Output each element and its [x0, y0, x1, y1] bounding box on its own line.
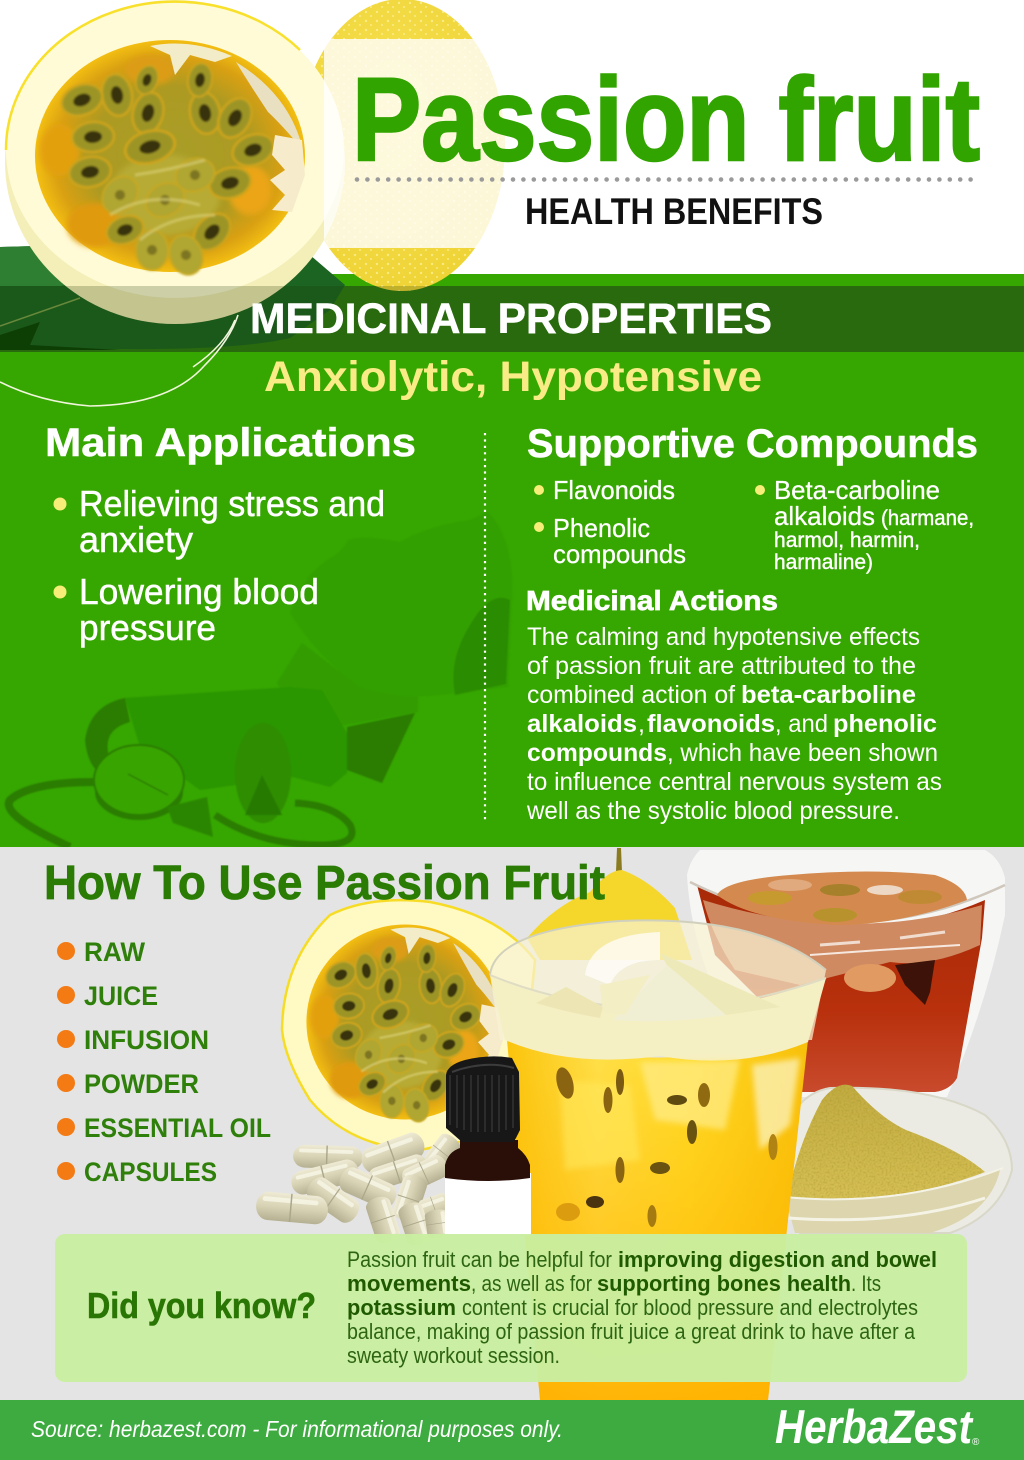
- callout body text: supporting bones health: [597, 1271, 851, 1296]
- source line: Source: herbazest.com - For informational purposes only.: [31, 1416, 563, 1442]
- item: raw: [57, 937, 145, 967]
- callout body text: [347, 1247, 937, 1368]
- passion fruit seeds in juice: [553, 1065, 778, 1227]
- illustration: woman and blood pressure monitor silhouette: [9, 512, 512, 847]
- bullet: relieving stress: anxiety: [79, 519, 193, 560]
- text: medicinal actions body: well as the systolic blood pressure.: [526, 797, 900, 825]
- callout body text: improving digestion and bowel: [618, 1247, 937, 1272]
- decorative overlay tint on band: [0, 286, 1024, 352]
- text: medicinal actions body: [526, 623, 942, 825]
- bullet: beta-carboline alkaloids: [755, 475, 974, 574]
- item: essential oil: ESSENTIAL OIL: [84, 1113, 271, 1143]
- item: juice: JUICE: [84, 981, 158, 1011]
- item: raw: RAW: [84, 937, 145, 967]
- bullet: relieving stress: Relieving stress and: [79, 483, 385, 524]
- text: medicinal actions body: alkaloids: [527, 710, 637, 738]
- dotted rule under title: [357, 177, 980, 182]
- illustration: thin white curve: [0, 315, 238, 406]
- panel: medicinal properties green background: [0, 274, 1024, 847]
- illustration: whole passion fruit: [299, 0, 505, 291]
- ice cubes: [536, 953, 780, 1021]
- logo: ®: [972, 1437, 980, 1448]
- text: medicinal actions body: phenolic: [833, 710, 937, 738]
- subheading: medicinal actions: Medicinal Actions: [526, 585, 778, 616]
- callout: did you know: [55, 1234, 967, 1382]
- illustration: halved passion fruit: [5, 0, 345, 324]
- callout heading: Did you know?: [87, 1285, 316, 1326]
- illustration: tea glass: [687, 850, 1005, 1097]
- text: medicinal actions body: , which have been shown: [667, 739, 938, 767]
- callout body text: sweaty workout session.: [347, 1343, 560, 1368]
- panel: main applications: [45, 421, 416, 648]
- callout body text: , as well as for: [471, 1271, 592, 1296]
- panel: supportive compounds: [526, 422, 978, 825]
- callout body text: content is crucial for blood pressure and electrolytes: [462, 1295, 918, 1320]
- illustration: leaf under fruit: [0, 246, 345, 350]
- bullet: phenolic compounds: compounds: [553, 539, 686, 569]
- bullet: beta-carboline alkaloids: (harmane,: [881, 507, 974, 530]
- callout body text: potassium: [347, 1295, 456, 1320]
- callout body text: balance, making of passion fruit juice a great drink to have after a: [347, 1319, 916, 1344]
- bullet: beta-carboline alkaloids: Beta-carboline: [774, 475, 940, 505]
- text: medicinal actions body: , and: [775, 710, 828, 738]
- text: medicinal actions body: The calming and hypotensive effects: [527, 623, 920, 651]
- text: medicinal actions body: combined action of: [527, 681, 735, 709]
- callout body text: Passion fruit can be helpful for: [347, 1247, 612, 1272]
- bullet: beta-carboline alkaloids: harmol, harmin,: [774, 529, 920, 552]
- illustration: back passion fruit: [527, 848, 692, 960]
- illustration: essential oil bottle: [445, 1056, 531, 1235]
- illustration: juice glass: [490, 920, 826, 1400]
- callout body text: . Its: [851, 1271, 881, 1296]
- callout body text: movements: [347, 1271, 471, 1296]
- bullet: beta-carboline alkaloids: alkaloids: [774, 501, 875, 531]
- footer: [0, 1400, 1024, 1460]
- heading: how to use: How To Use Passion Fruit: [44, 857, 605, 910]
- bullet: lowering blood pressure: Lowering blood: [79, 571, 319, 612]
- bullet: lowering blood pressure: pressure: [79, 607, 216, 648]
- illustration: halved fruit: [282, 900, 535, 1150]
- heading: Supportive Compounds: [527, 422, 978, 466]
- item: infusion: INFUSION: [84, 1025, 209, 1055]
- light patches in juice: [560, 1058, 800, 1170]
- subtitle: HEALTH BENEFITS: [525, 191, 823, 232]
- text: properties: Anxiolytic, Hypotensive: [264, 353, 762, 401]
- bullet: flavonoids: Flavonoids: [553, 475, 675, 505]
- item: capsules: CAPSULES: [84, 1157, 217, 1187]
- text: medicinal actions body: compounds: [527, 739, 667, 767]
- panel: how to use background: [0, 847, 1024, 1400]
- bullet: phenolic compounds: [534, 513, 686, 569]
- bullet: lowering blood pressure: [54, 571, 319, 648]
- text: medicinal actions body: flavonoids: [647, 710, 775, 738]
- item: juice: [57, 981, 158, 1011]
- illustration: capsules: [255, 1130, 464, 1248]
- dark title band: [0, 286, 1024, 352]
- column divider: [484, 433, 486, 820]
- text: medicinal actions body: ,: [638, 710, 645, 738]
- bullet: relieving stress: [54, 483, 385, 560]
- text: medicinal actions body: beta-carboline: [741, 681, 916, 709]
- illustration: powder bowl: [780, 1085, 1012, 1233]
- bullet: phenolic compounds: Phenolic: [553, 513, 650, 543]
- heading: medicinal properties: MEDICINAL PROPERTIES: [250, 295, 772, 343]
- heading: Main Applications: [45, 421, 416, 465]
- bullet: beta-carboline alkaloids: harmaline): [774, 551, 873, 574]
- item: powder: POWDER: [84, 1069, 199, 1099]
- list: ways to use: [57, 937, 271, 1187]
- logo: HerbaZest: [775, 1400, 974, 1453]
- text: medicinal actions body: to influence central nervous system as: [527, 768, 942, 796]
- header panel: translucent white: [324, 39, 1024, 248]
- text: medicinal actions body: of passion fruit are attributed to the: [527, 652, 916, 680]
